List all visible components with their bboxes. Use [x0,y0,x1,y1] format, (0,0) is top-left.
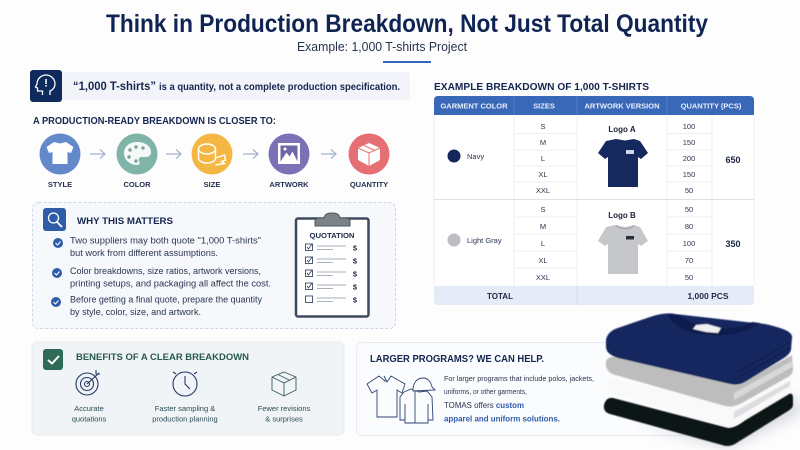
body text: For larger programs that include polos, jackets, [444,374,594,383]
icon: green check [43,349,63,370]
bullet 3: Before getting a final quote, prepare the quantity [70,294,262,304]
callout: quantity is not a specification [30,70,410,102]
row: light gray: XXL [536,273,550,282]
icon: quotation clipboard: $ [353,282,358,292]
icon: quotation clipboard [296,213,368,316]
row: navy: 650 [725,155,741,165]
table grid [434,115,754,286]
bullet 2: printing setups, and packaging all affect the cost. [70,278,271,288]
icon: quotation clipboard: $ [353,244,358,252]
bullet 2 [52,266,271,288]
heading: WHY THIS MATTERS [77,216,173,227]
row: navy [448,122,741,195]
row: light gray: L [541,239,545,248]
row: light gray: M [540,222,546,231]
table header [434,96,754,115]
row: light gray: 50 [685,273,693,282]
row: navy: 100 [683,122,695,131]
body text [444,374,594,424]
row: navy: 200 [683,154,695,163]
table header: ARTWORK VERSION [584,102,660,110]
row: light gray: 100 [683,239,695,248]
row: light gray: Light Gray [467,236,502,245]
row: light gray: 70 [685,256,693,265]
label: artwork: ARTWORK [269,180,309,189]
subtitle: Example: 1,000 T-shirts Project [297,40,468,54]
row: light gray: 350 [725,239,741,249]
bullet 3: by style, color, size, and artwork. [70,307,201,317]
icon: quotation clipboard: $ [353,270,358,278]
body text: apparel and uniform solutions. [444,414,560,424]
benefit: faster sampling: production planning [152,414,218,424]
benefit: accurate quotations: quotations [72,414,107,424]
benefit: fewer revisions [258,372,311,424]
icon: garments [367,376,435,423]
callout text [73,79,400,93]
total row: 1,000 PCS [687,291,729,301]
row: navy: M [540,138,546,147]
heading: BENEFITS OF A CLEAR BREAKDOWN [76,352,249,363]
total row: TOTAL [487,292,513,301]
row: navy: XL [538,170,548,179]
bullet 2: Color breakdowns, size ratios, artwork versions, [70,266,261,276]
heading: LARGER PROGRAMS? WE CAN HELP. [370,354,544,365]
row: navy: 150 [683,138,695,147]
arrow [243,150,258,158]
row: navy: L [541,154,545,163]
label: color: COLOR [123,180,151,189]
row: light gray: Logo B [608,211,636,220]
label: style: STYLE [48,180,72,189]
icon: size [192,134,232,174]
row: light gray [448,205,741,282]
callout text: is a quantity, not a complete production specification. [159,81,400,93]
benefit: accurate quotations [72,370,107,424]
benefit: faster sampling [152,372,218,424]
title: Think in Production Breakdown, Not Just Total Quantity [106,10,708,38]
heading: production-ready breakdown: A PRODUCTION-READY BREAKDOWN IS CLOSER TO: [33,115,276,127]
panel: larger programs [356,342,686,436]
bullet 3 [51,294,262,317]
callout text: “1,000 T-shirts” [73,79,156,93]
icon: quantity [348,134,390,174]
folded shirts stack [604,313,800,447]
bullet 1: but work from different assumptions. [70,248,218,258]
icon: gray t-shirt [598,225,648,274]
row: navy: 150 [683,170,695,179]
panel: why this matters [32,202,396,328]
table header: GARMENT COLOR [440,102,508,110]
panel: example breakdown table [434,81,754,305]
row: navy: 50 [685,186,693,195]
icon: head with exclamation [30,70,62,102]
icon: quotation clipboard: $ [353,296,358,304]
arrow [321,150,336,158]
row: navy: XXL [536,186,550,195]
row: light gray: 80 [685,222,693,231]
arrow [166,150,181,158]
table heading: EXAMPLE BREAKDOWN OF 1,000 T-SHIRTS [434,81,649,93]
benefit: fewer revisions: & surprises [265,414,303,424]
row: light gray: S [540,205,546,214]
label: size: SIZE [204,180,220,189]
benefit: accurate quotations: Accurate [74,404,104,413]
body text: TOMAS offers custom [444,401,524,410]
title underline [383,61,431,63]
row: navy: Navy [467,152,484,161]
label: quantity: QUANTITY [350,180,388,189]
bullet 1 [53,236,261,258]
icon: style [40,134,80,174]
row: navy: S [540,122,546,131]
icon: color [116,134,158,174]
icon: navy t-shirt [598,139,648,187]
bullet 1: Two suppliers may both quote "1,000 T-shirts" [70,236,261,246]
row: navy: Logo A [608,125,636,134]
table body [434,115,754,286]
arrow [90,150,105,158]
icon: quotation clipboard: $ [353,256,358,266]
benefit: faster sampling: Faster sampling & [155,404,215,413]
row: light gray: XL [538,256,548,265]
table header: QUANTITY (PCS) [681,102,742,110]
process flow [40,134,390,189]
icon: quotation clipboard: QUOTATION [310,233,354,240]
panel: benefits [32,342,344,435]
total row [434,286,754,305]
icon: magnifier [43,208,66,231]
icon: artwork [268,134,310,174]
row: light gray: 50 [685,205,693,214]
body text: uniforms, or other garments, [444,387,527,396]
table header: SIZES [533,102,555,110]
benefit: fewer revisions: Fewer revisions [258,404,311,413]
